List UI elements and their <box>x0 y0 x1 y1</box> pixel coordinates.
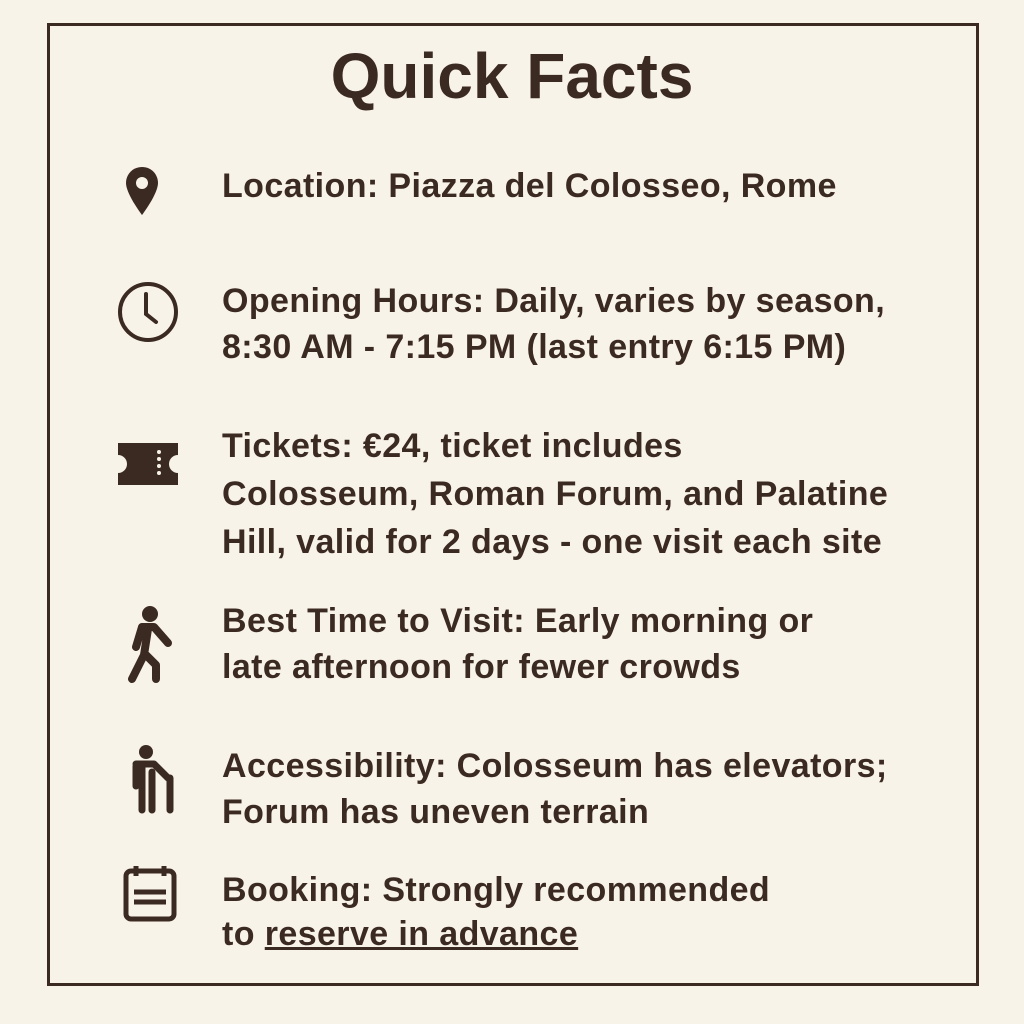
text: tickets: Tickets: €24, ticket includes <box>222 427 683 465</box>
text: opening hours: 8:30 AM - 7:15 PM (last entry 6:15 PM) <box>222 328 846 366</box>
text: accessibility <box>222 747 888 831</box>
text: opening hours: Opening Hours: Daily, varies by season, <box>222 282 885 320</box>
icon: elderly person <box>132 745 174 814</box>
text: best time: Best Time to Visit: Early morning or <box>222 602 813 640</box>
text: booking: Booking: Strongly recommended <box>222 871 770 909</box>
text: booking <box>222 871 770 953</box>
icon: calendar <box>124 866 176 922</box>
text: tickets <box>222 427 888 561</box>
text: location: Location: Piazza del Colosseo, Rome <box>222 167 837 205</box>
text: best time <box>222 602 813 686</box>
icon: clock <box>118 282 178 342</box>
icon: walking person <box>128 606 172 683</box>
text: booking: to reserve in advance <box>222 915 578 953</box>
text: tickets: Hill, valid for 2 days - one visit each site <box>222 523 882 561</box>
title: Quick Facts <box>331 40 693 112</box>
text: accessibility: Forum has uneven terrain <box>222 793 649 831</box>
text: best time: late afternoon for fewer crowds <box>222 648 741 686</box>
text: tickets: Colosseum, Roman Forum, and Palatine <box>222 475 888 513</box>
text: accessibility: Accessibility: Colosseum has elevators; <box>222 747 888 785</box>
icon: location pin <box>126 167 158 215</box>
icon: ticket <box>118 443 178 485</box>
text: opening hours <box>222 282 885 366</box>
